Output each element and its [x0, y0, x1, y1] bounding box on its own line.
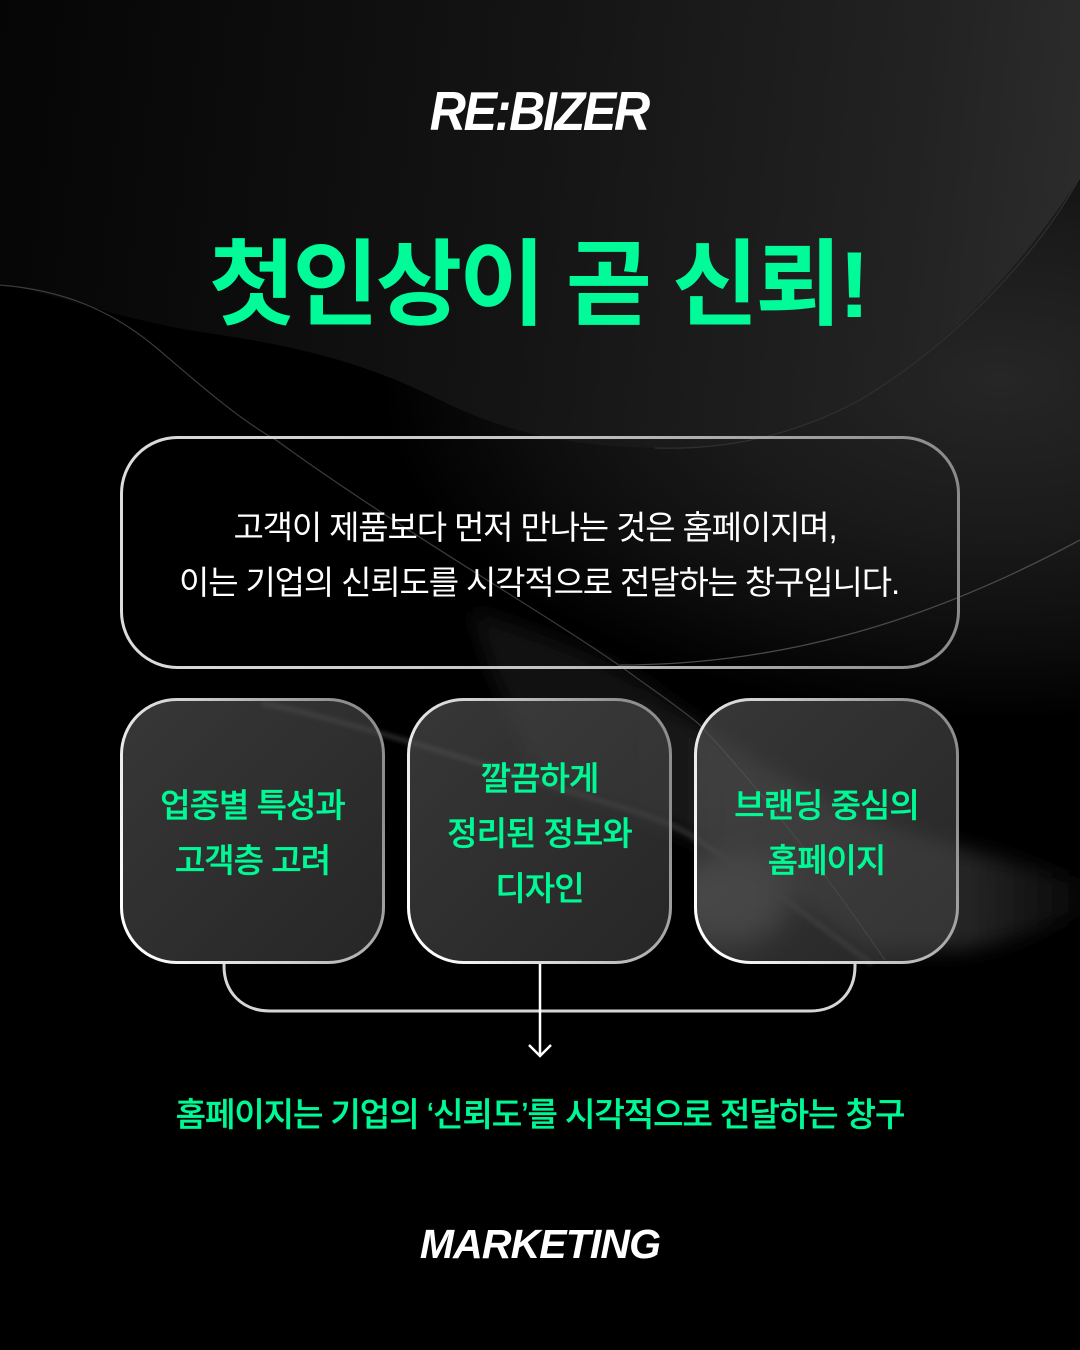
logo: RE:BIZER [430, 80, 648, 142]
card: clean design: 깔끔하게 [481, 760, 598, 796]
card: industry: 업종별 특성과 [160, 787, 345, 824]
card: branding [694, 698, 959, 964]
background waves [0, 0, 1080, 966]
title: 첫인상이 곧 신뢰! [209, 232, 867, 337]
connector arrow [222, 964, 856, 1058]
footer label: MARKETING [420, 1221, 660, 1267]
card: branding: 홈페이지 [768, 842, 885, 879]
panel: intro text [120, 436, 960, 669]
card: clean design: 디자인 [495, 870, 584, 906]
conclusion text: 홈페이지는 기업의 ‘신뢰도’를 시각적으로 전달하는 창구 [176, 1096, 904, 1133]
card: branding: 브랜딩 중심의 [734, 787, 919, 824]
card: clean design [407, 698, 672, 964]
panel: intro text: 고객이 제품보다 먼저 만나는 것은 홈페이지며, [233, 509, 837, 546]
card: clean design: 정리된 정보와 [447, 814, 632, 852]
card: industry [120, 698, 385, 964]
card: industry: 고객층 고려 [175, 842, 330, 879]
panel: intro text: 이는 기업의 신뢰도를 시각적으로 전달하는 창구입니다. [179, 564, 899, 601]
